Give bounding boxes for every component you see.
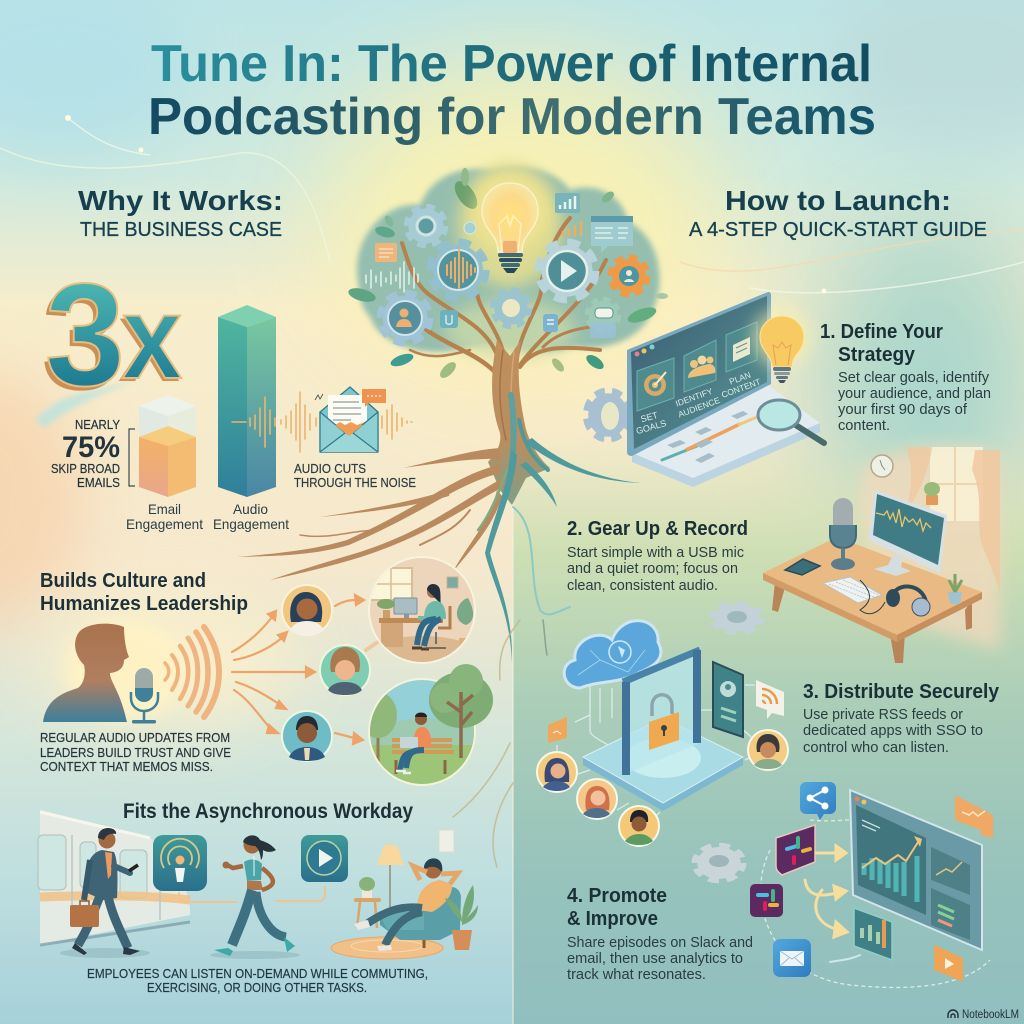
monitor: [868, 490, 947, 576]
dashed loop: [761, 820, 990, 987]
75% callout: NEARLY: [75, 418, 121, 432]
heading: Fits the Asynchronous Workday: [123, 800, 413, 823]
sound wave: [232, 392, 412, 452]
caption: [87, 966, 428, 995]
keyboard: [823, 577, 882, 603]
heading: how to launch: How to Launch:: [725, 185, 951, 216]
tile: plan content: CONTENT: [720, 376, 762, 400]
platform: [583, 718, 743, 811]
tile: plan content: [720, 322, 762, 400]
timeline on keyboard: [662, 411, 770, 463]
tablet: [785, 559, 820, 575]
heading: why it works: THE BUSINESS CASE: [80, 219, 282, 241]
bar labels: Engagement: [126, 516, 203, 532]
3x stat: [35, 253, 182, 428]
75% callout: 75%: [62, 431, 120, 464]
avatar 3: [282, 711, 332, 761]
title: Podcasting for Modern Teams: [148, 88, 876, 146]
mail tile: [773, 939, 811, 977]
connector lines: [557, 685, 765, 822]
heading: [567, 884, 667, 930]
body: [567, 545, 744, 594]
avatar: [577, 779, 617, 819]
floating gear: [695, 846, 743, 880]
thin lower roots: [453, 620, 547, 867]
connector lines: [179, 887, 325, 902]
body: and a quiet room; focus on: [567, 561, 738, 577]
avatar: [748, 730, 788, 770]
side table and plant: [354, 877, 381, 928]
3x stat: 3: [41, 257, 121, 420]
cloud: [564, 621, 661, 688]
75% callout: EMAILS: [77, 476, 120, 490]
floor lamp: [377, 845, 404, 910]
park tree: [429, 664, 493, 758]
slack tile large: [776, 825, 815, 875]
relaxing listener: [331, 830, 478, 959]
desk plant: [948, 574, 962, 604]
laptop: [627, 292, 820, 487]
train: [38, 810, 190, 945]
desk: [763, 537, 982, 663]
bar labels: Email: [148, 501, 181, 517]
title: [148, 35, 876, 146]
heading: 4. Promote: [567, 884, 667, 907]
email bar: [139, 395, 196, 497]
orange trend tile: [955, 795, 993, 838]
body: clean, consistent audio.: [567, 578, 718, 594]
avatar: [537, 752, 577, 792]
commuter: [60, 828, 150, 958]
tile: set goals: [635, 358, 674, 436]
tile: identify audience: [674, 340, 722, 419]
leader silhouette: [43, 624, 129, 722]
heading: how to launch: A 4-STEP QUICK-START GUIDE: [689, 219, 987, 241]
mini chart tile: [854, 908, 892, 960]
tile: set goals: GOALS: [635, 418, 667, 436]
bar labels: [126, 501, 289, 532]
step 1: define strategy: [583, 292, 991, 487]
body: Start simple with a USB mic: [567, 545, 744, 561]
tile: set goals: SET: [639, 410, 659, 424]
tree: [237, 163, 668, 867]
tile: identify audience: IDENTIFY: [674, 386, 714, 409]
caption: EXERCISING, OR DOING OTHER TASKS.: [147, 980, 367, 995]
step 2: gear up and record: [567, 446, 1000, 663]
right bulb: [752, 308, 812, 383]
scene: home office: [368, 556, 476, 664]
runner: [210, 835, 300, 959]
caption: REGULAR AUDIO UPDATES FROM: [40, 730, 230, 745]
avatar: [619, 806, 659, 846]
scene: park bench: [359, 664, 493, 790]
orange play tile: [934, 945, 963, 982]
audio cuts caption: THROUGH THE NOISE: [294, 476, 416, 490]
75% callout: [51, 418, 135, 490]
step 4: promote and improve: [567, 782, 993, 987]
body: Use private RSS feeds or: [803, 707, 963, 723]
heading: & Improve: [567, 907, 658, 930]
heading: Strategy: [838, 343, 916, 366]
dashboard: [850, 790, 982, 950]
secure gateway: [623, 650, 700, 775]
yellow arrows: [805, 846, 860, 962]
studio microphone: [830, 498, 856, 570]
heading: how to launch: [689, 185, 987, 241]
slack tile small: [750, 884, 783, 917]
heading: 3. Distribute Securely: [803, 680, 1000, 703]
heading: Humanizes Leadership: [40, 592, 248, 615]
floating gear: [712, 603, 762, 633]
caption: CONTEXT THAT MEMOS MISS.: [40, 759, 213, 774]
body: your audience, and plan: [838, 386, 991, 402]
caption: [40, 730, 231, 774]
3x stat: x: [118, 275, 180, 407]
canopy: [357, 163, 660, 360]
armchair: [378, 887, 461, 948]
body: [567, 935, 753, 983]
body: Set clear goals, identify: [838, 370, 990, 386]
caption: LEADERS BUILD TRUST AND GIVE: [40, 745, 231, 760]
gear behind laptop: [583, 387, 633, 443]
audio bar: [218, 305, 276, 497]
envelope icon: [315, 387, 386, 452]
tile: identify audience: AUDIENCE: [677, 395, 722, 419]
podcast app tile: [153, 835, 207, 891]
body: dedicated apps with SSO to: [803, 723, 983, 739]
body: email, then use analytics to: [567, 951, 743, 967]
panel: business case chart: [35, 253, 416, 532]
title: Tune In: The Power of Internal: [151, 35, 872, 93]
share bubble: [800, 782, 836, 820]
trunk and roots: [237, 340, 640, 662]
headphones: [860, 580, 930, 616]
body: [838, 370, 991, 434]
panel: asynchronous workday: [38, 800, 478, 995]
body: content.: [838, 418, 890, 434]
audio cuts caption: [294, 462, 416, 490]
room backdrop: [860, 446, 1000, 650]
bar labels: Audio: [233, 501, 268, 517]
leaves: [347, 168, 668, 381]
heading: why it works: Why It Works:: [78, 185, 283, 216]
magnifier: [758, 400, 824, 443]
leader glow: [65, 620, 185, 720]
step 3: distribute securely: [537, 621, 1000, 846]
heading: why it works: [78, 185, 283, 241]
heading: 1. Define Your: [820, 320, 943, 343]
heading: [40, 569, 248, 615]
potted plant: [445, 885, 478, 950]
caption: EMPLOYEES CAN LISTEN ON-DEMAND WHILE COMMUTING,: [87, 966, 428, 981]
avatar 1: [282, 585, 332, 635]
light bulb: [472, 174, 548, 273]
tile: plan content: PLAN: [728, 370, 752, 387]
small orange tile: [548, 717, 567, 743]
heading: Builds Culture and: [40, 569, 206, 592]
3x stat: 3: [45, 253, 125, 416]
audio cuts caption: AUDIO CUTS: [294, 462, 366, 476]
RSS bubble: [756, 680, 784, 719]
sound arcs: [165, 627, 219, 717]
75% callout: SKIP BROAD: [51, 462, 120, 476]
heading: [820, 320, 943, 366]
wall picture: [439, 830, 454, 852]
body: your first 90 days of: [838, 402, 968, 418]
3x stat: x: [122, 272, 182, 404]
person on bench: [392, 712, 454, 774]
avatar 2: [320, 645, 370, 695]
microphone: [131, 668, 158, 724]
arrows: [232, 595, 378, 744]
body: Share episodes on Slack and: [567, 935, 753, 951]
wall clock: [871, 455, 893, 477]
bar labels: Engagement: [213, 516, 289, 532]
floating data tiles: [366, 193, 633, 332]
branches: [402, 218, 606, 372]
panel: builds culture: [40, 550, 493, 790]
gears in canopy: [380, 207, 648, 342]
body: [803, 707, 983, 756]
play app tile: [301, 835, 348, 882]
phone: [713, 662, 743, 737]
body: control who can listen.: [803, 740, 949, 756]
heading: 2. Gear Up & Record: [567, 517, 748, 540]
body: track what resonates.: [567, 967, 706, 983]
decorative light waves: [0, 115, 1024, 294]
padlock: [649, 695, 679, 750]
window plant: [924, 482, 940, 505]
